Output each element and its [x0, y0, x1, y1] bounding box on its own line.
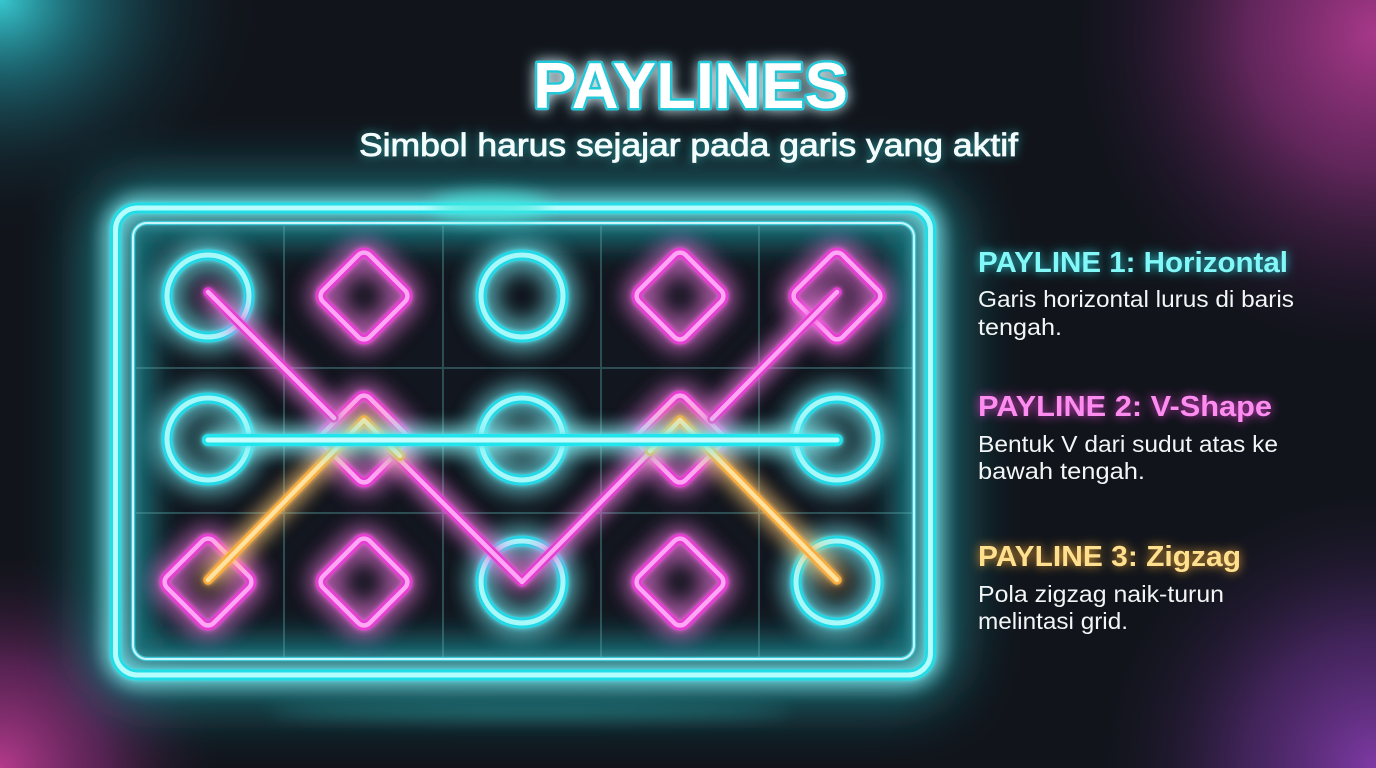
payline 1 heading: PAYLINE 1: Horizontal: [978, 247, 1288, 279]
panel: payline grid: [116, 193, 930, 675]
payline 3 description: [978, 581, 1224, 634]
title: PAYLINES: [533, 49, 848, 122]
top glare: [432, 193, 548, 221]
legend: payline 1: [978, 247, 1294, 340]
grid lines: [136, 226, 912, 657]
payline 1 description: Garis horizontal lurus di baris: [978, 286, 1294, 312]
payline 3 description: melintasi grid.: [978, 608, 1128, 634]
diamond symbols: [161, 249, 884, 629]
legend: payline 3: [978, 541, 1241, 634]
panel interior: [133, 223, 914, 659]
legend: payline 2: [978, 391, 1278, 484]
circle symbols: [167, 255, 878, 623]
payline 1 description: tengah.: [978, 314, 1062, 340]
payline 3 description: Pola zigzag naik-turun: [978, 581, 1224, 607]
payline 2: pink V line: [208, 292, 837, 582]
subtitle: Simbol harus sejajar pada garis yang aktif: [359, 127, 1019, 163]
payline 3 heading: PAYLINE 3: Zigzag: [978, 541, 1241, 573]
payline 2 heading: PAYLINE 2: V-Shape: [978, 391, 1272, 423]
outer neon frame: [116, 208, 930, 675]
payline 2 description: [978, 431, 1278, 484]
payline 1 description: [978, 286, 1294, 340]
payline 3: yellow zigzag line: [208, 420, 837, 580]
payline 2 description: bawah tengah.: [978, 458, 1145, 484]
inner neon frame: [133, 223, 914, 659]
payline 1: cyan horizontal line: [208, 434, 837, 446]
payline 2 description: Bentuk V dari sudut atas ke: [978, 431, 1278, 457]
